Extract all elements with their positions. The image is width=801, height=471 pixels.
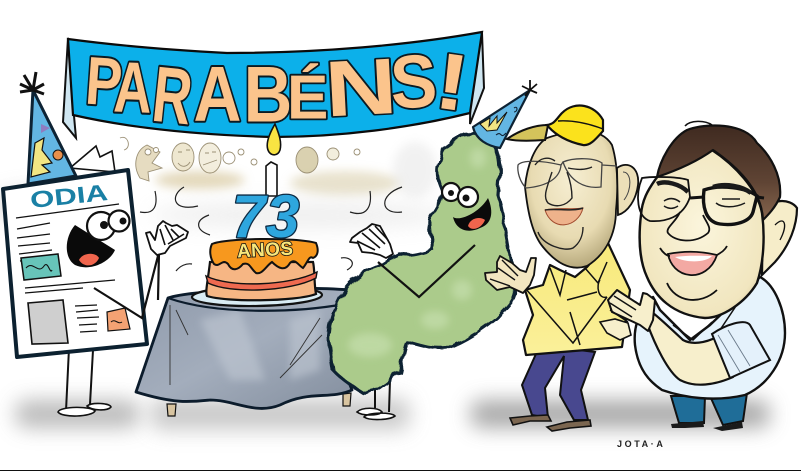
candle flame — [267, 124, 281, 155]
shirt folds and arm — [525, 262, 607, 345]
glasses — [638, 177, 764, 224]
sleeve — [712, 322, 770, 378]
banner title — [83, 35, 474, 142]
arm — [647, 313, 733, 385]
banner right ribbon — [470, 33, 484, 124]
collar — [673, 300, 760, 360]
table — [136, 288, 352, 416]
newspaper character — [3, 72, 188, 416]
shoes — [510, 415, 591, 431]
age number: 73 — [232, 183, 299, 250]
face — [525, 131, 617, 268]
ear — [617, 165, 638, 215]
banner cloth — [68, 32, 482, 137]
younger man in blue shirt — [600, 121, 797, 431]
front hand — [608, 290, 655, 331]
anos label: ANOS — [237, 239, 294, 262]
banner — [63, 32, 484, 142]
banner title: P — [83, 43, 125, 121]
map face — [442, 183, 491, 231]
table top edge — [168, 298, 345, 311]
face — [640, 150, 764, 318]
newspaper arm and hand — [94, 221, 188, 318]
tablecloth — [136, 288, 352, 408]
mouth — [668, 252, 717, 275]
cap — [547, 106, 603, 145]
banner title: N — [323, 43, 399, 134]
blue shirt — [635, 277, 785, 399]
cake red filling — [206, 272, 317, 290]
newspaper legs — [58, 348, 111, 416]
map hand — [350, 224, 393, 258]
banner title: R — [149, 51, 196, 142]
trousers — [522, 345, 595, 420]
newspaper orange block — [107, 308, 130, 331]
banner title: É — [287, 64, 328, 132]
motion lines — [140, 187, 402, 271]
newspaper back pages — [70, 146, 115, 172]
map highlights — [348, 148, 486, 357]
bottom rule — [0, 470, 801, 471]
map legs — [357, 380, 395, 420]
eyebrows and closed eyes — [657, 182, 751, 208]
map body — [329, 132, 515, 393]
older man in yellow — [485, 106, 638, 431]
newspaper face — [67, 210, 130, 267]
signature: JOTA·A — [617, 439, 665, 449]
map arm — [378, 245, 475, 297]
candle — [266, 162, 277, 196]
cap visor — [507, 125, 548, 141]
banner title: B — [244, 50, 292, 139]
trousers — [671, 393, 747, 425]
banner left ribbon — [63, 38, 76, 138]
cake — [192, 124, 322, 307]
hair — [657, 125, 780, 220]
faint background crowd — [120, 137, 360, 181]
background shadows — [0, 142, 770, 430]
newspaper page — [3, 170, 147, 357]
banner title: S — [388, 39, 439, 125]
cake body — [206, 262, 316, 300]
ear — [762, 201, 797, 275]
map party hat — [473, 80, 537, 148]
table legs — [167, 393, 351, 416]
smile lines — [660, 246, 727, 300]
cloth shading — [200, 310, 320, 380]
newspaper text lines — [16, 204, 119, 332]
cake icing — [210, 239, 318, 273]
map character — [329, 80, 537, 420]
clapping hand — [485, 256, 536, 293]
party hat — [20, 72, 76, 184]
banner title: A — [194, 50, 241, 138]
plate — [192, 285, 322, 307]
back hand — [600, 319, 631, 340]
shoes — [671, 421, 743, 431]
mouth — [545, 208, 583, 225]
yellow shirt — [523, 243, 630, 355]
nose — [667, 212, 709, 241]
newspaper logo: ODIA — [29, 179, 109, 213]
newspaper photo block — [28, 300, 68, 344]
banner title: ! — [430, 35, 474, 128]
facial features — [535, 158, 592, 249]
newspaper chart block — [21, 254, 61, 280]
banner title: A — [112, 48, 153, 129]
glasses — [518, 159, 617, 188]
